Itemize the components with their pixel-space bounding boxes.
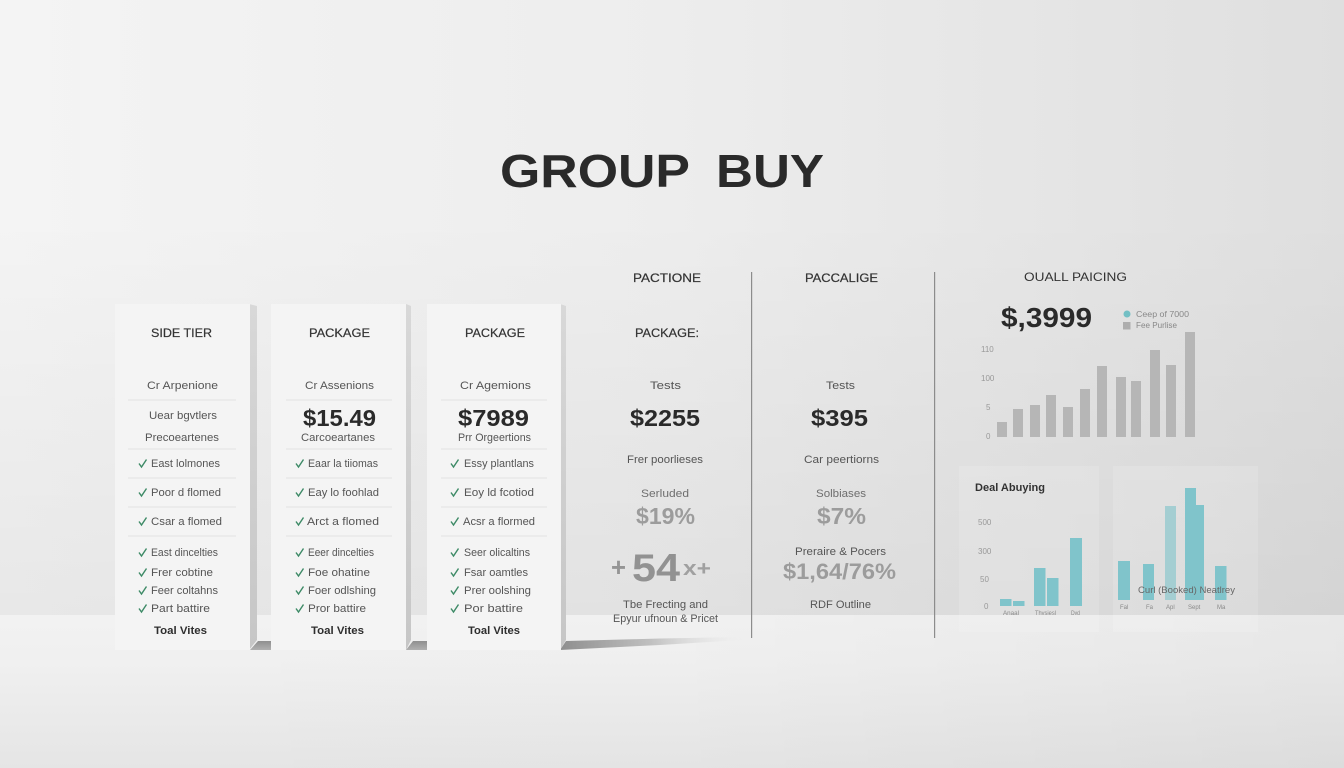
panel: side tier card: Frer cobtine bbox=[151, 567, 213, 579]
column: pactione pricing: PACTIONE bbox=[633, 271, 701, 285]
panel: second teal chart: Fal bbox=[1120, 605, 1128, 611]
legend bbox=[1123, 309, 1189, 330]
column: pactione pricing: Frer poorlieses bbox=[627, 454, 704, 466]
overall price figure: $,3999 bbox=[1001, 302, 1092, 333]
column: pactione pricing: $2255 bbox=[630, 405, 700, 431]
panel: side tier card: Poor d flomed bbox=[151, 487, 221, 499]
panel: package card three: Toal Vites bbox=[468, 625, 520, 637]
panel: second teal chart: Sept bbox=[1188, 605, 1201, 611]
panel: package card two: Eeer dincelties bbox=[308, 547, 374, 559]
panel: second teal chart: Apl bbox=[1166, 605, 1175, 611]
panel: package card three: Seer olicaltins bbox=[464, 547, 530, 559]
panel: package card two bbox=[271, 304, 427, 650]
panel: package card two: Eaar la tiiomas bbox=[308, 458, 378, 470]
column: pactione pricing: 54 bbox=[632, 547, 680, 590]
column: paccalige pricing: Tests bbox=[826, 380, 856, 392]
panel: side tier card: Part battire bbox=[151, 603, 210, 615]
panel: package card three: Acsr a flormed bbox=[463, 516, 535, 528]
panel: deal analyzing chart: Deal Abuying bbox=[975, 482, 1045, 494]
column: paccalige pricing: Solbiases bbox=[816, 488, 867, 500]
panel: deal analyzing chart: 300 bbox=[978, 547, 992, 556]
panel: side tier card bbox=[115, 304, 271, 650]
panel: second teal chart: Curl (Booked) Neatlrey bbox=[1138, 585, 1235, 596]
column: paccalige pricing bbox=[783, 271, 896, 611]
legend: Ceep of 7000 bbox=[1136, 309, 1189, 319]
floor bbox=[0, 615, 1344, 768]
panel: package card three bbox=[427, 304, 742, 650]
column: paccalige pricing: $7% bbox=[817, 503, 866, 529]
panel: deal analyzing chart: Dvd bbox=[1071, 611, 1080, 617]
panel: side tier card: Uear bgvtlers bbox=[149, 410, 218, 422]
panel: package card three: Essy plantlans bbox=[464, 458, 534, 470]
column: paccalige pricing: PACCALIGE bbox=[805, 271, 878, 285]
panel: deal analyzing chart: Anaal bbox=[1003, 611, 1019, 617]
column: pactione pricing: PACKAGE: bbox=[635, 326, 699, 340]
column: paccalige pricing: $1,64/76% bbox=[783, 559, 896, 584]
divider line bbox=[934, 272, 935, 638]
bar chart: overall pricing bbox=[981, 332, 1195, 441]
column: pactione pricing: x+ bbox=[683, 558, 711, 580]
panel: package card three: $7989 bbox=[458, 405, 529, 431]
column: pactione pricing: $19% bbox=[636, 503, 695, 529]
legend: Fee Purlise bbox=[1136, 320, 1177, 330]
panel: package card two: Foe ohatine bbox=[308, 567, 370, 579]
panel: deal analyzing chart: Thvsiesl bbox=[1035, 611, 1056, 617]
panel: side tier card: Feer coltahns bbox=[151, 585, 218, 597]
panel: package card two: Foer odlshing bbox=[308, 585, 376, 597]
column: pactione pricing: + bbox=[611, 552, 626, 582]
panel: side tier card: SIDE TIER bbox=[151, 326, 212, 340]
bar chart: overall pricing: 110 bbox=[981, 345, 994, 354]
panel: package card three: Prr Orgeertions bbox=[458, 432, 531, 444]
column: pactione pricing: Epyur ufnoun & Pricet bbox=[613, 613, 718, 625]
column: pactione pricing: Tbe Frecting and bbox=[623, 599, 708, 611]
panel: side tier card: Csar a flomed bbox=[151, 516, 222, 528]
panel: deal analyzing chart: 500 bbox=[978, 518, 992, 527]
panel: second teal chart: Fa bbox=[1146, 605, 1154, 611]
heading: overall pricing: OUALL PAICING bbox=[1024, 270, 1127, 284]
panel: package card three: Cr Agemions bbox=[460, 380, 532, 392]
bar chart: overall pricing: 5 bbox=[986, 403, 991, 412]
column: paccalige pricing: RDF Outline bbox=[810, 599, 871, 611]
title: GROUP bbox=[500, 145, 690, 197]
column: paccalige pricing: Preraire & Pocers bbox=[795, 546, 887, 558]
bar chart: overall pricing: 100 bbox=[981, 374, 995, 383]
column: paccalige pricing: $395 bbox=[811, 405, 868, 431]
panel: deal analyzing chart: 50 bbox=[980, 575, 989, 584]
panel: side tier card: East lolmones bbox=[151, 458, 220, 470]
panel: second teal chart: Ma bbox=[1217, 605, 1226, 611]
panel: package card two: PACKAGE bbox=[309, 326, 370, 340]
panel: package card two: $15.49 bbox=[303, 405, 376, 431]
panel: package card three: Eoy ld fcotiod bbox=[464, 487, 534, 499]
panel: deal analyzing chart: 0 bbox=[984, 602, 989, 611]
panel: deal analyzing chart bbox=[959, 466, 1099, 632]
column: paccalige pricing: Car peertiorns bbox=[804, 454, 880, 466]
column: pactione pricing bbox=[611, 271, 718, 625]
panel: package card two: Pror battire bbox=[308, 603, 366, 615]
title bbox=[500, 145, 824, 197]
panel: package card two: Arct a flomed bbox=[307, 516, 379, 528]
column: pactione pricing: Serluded bbox=[641, 488, 689, 500]
panel: package card two: Toal Vites bbox=[311, 625, 364, 637]
panel: side tier card: Cr Arpenione bbox=[147, 380, 218, 392]
divider line bbox=[751, 272, 752, 638]
panel: package card two: Eay lo foohlad bbox=[308, 487, 379, 499]
panel: side tier card: East dincelties bbox=[151, 547, 218, 559]
panel: package card three: Prer oolshing bbox=[464, 585, 531, 597]
panel: package card two: Carcoeartanes bbox=[301, 432, 376, 444]
panel: side tier card: Toal Vites bbox=[154, 625, 207, 637]
panel: package card two: Cr Assenions bbox=[305, 380, 375, 392]
panel: package card three: Fsar oamtles bbox=[464, 567, 528, 579]
panel: package card three: PACKAGE bbox=[465, 326, 525, 340]
panel: package card three: Por battire bbox=[464, 603, 523, 615]
panel: second teal chart bbox=[1113, 466, 1258, 632]
bar chart: overall pricing: 0 bbox=[986, 432, 991, 441]
title: BUY bbox=[716, 145, 824, 197]
panel: side tier card: Precoeartenes bbox=[145, 432, 220, 444]
column: pactione pricing: Tests bbox=[650, 380, 682, 392]
